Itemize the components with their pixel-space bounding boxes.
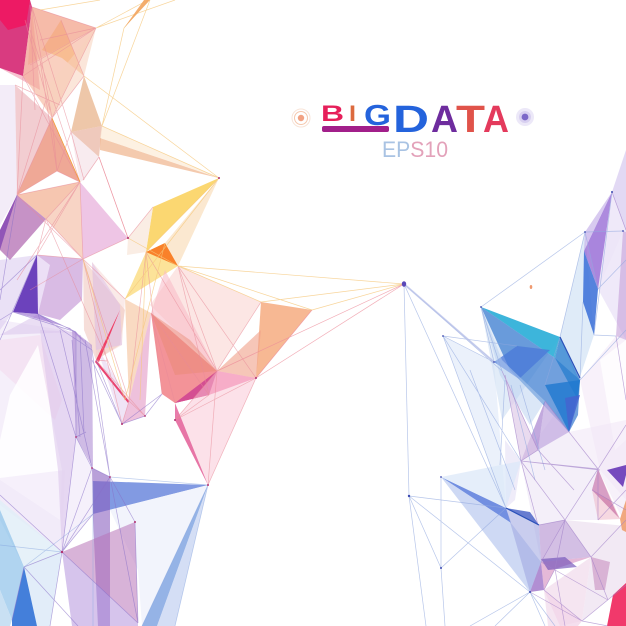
polygon mesh: right cluster <box>404 150 626 626</box>
heading: BIG DATA: A <box>431 99 458 141</box>
mesh: cool wire lines <box>0 195 162 626</box>
heading: BIG DATA: A <box>483 99 509 141</box>
apex node <box>402 281 406 287</box>
mesh: vertex dots <box>61 177 257 553</box>
polygon mesh: left cluster <box>0 0 404 626</box>
heading: BIG DATA: D <box>393 99 429 141</box>
heading: BIG DATA: G <box>364 100 391 132</box>
mesh: violet top facets <box>584 192 626 340</box>
mesh: deep blue ridge line <box>506 337 580 525</box>
logo underbar <box>322 126 389 132</box>
subheading: EPS10: EPS10 <box>382 137 448 162</box>
logo: Big Data title <box>292 99 534 162</box>
heading: BIG DATA: B <box>321 101 344 126</box>
mesh: pink long spokes <box>96 157 404 378</box>
heading: BIG DATA <box>321 99 509 141</box>
mesh: lower left blue and violet facets <box>0 468 208 626</box>
mesh: peach upper facets <box>23 7 219 182</box>
icon: violet concentric target <box>516 108 534 126</box>
mesh: thick light spoke <box>404 284 494 362</box>
heading: BIG DATA: T <box>456 99 485 141</box>
mesh: blue wire lines <box>0 477 208 626</box>
mesh: orange spark top <box>124 0 150 28</box>
mesh: hot pink corner facet <box>607 583 626 626</box>
mesh: pale background veils <box>0 85 129 552</box>
mesh: warm wire lines <box>15 5 261 485</box>
stray orange dot <box>530 285 532 289</box>
mesh: vertex dots <box>408 191 624 593</box>
mesh: orange edge highlight <box>52 118 80 182</box>
mesh: blue wire lines <box>404 192 626 626</box>
mesh: cyan and blue focal facets <box>481 307 580 432</box>
mesh: purple facets <box>13 255 125 468</box>
icon: orange concentric target <box>292 109 310 127</box>
mesh: blue lower facets <box>441 461 541 592</box>
heading: BIG DATA: I <box>349 101 356 126</box>
mesh: yellow focal facet <box>125 178 219 299</box>
mesh: orange and coral facets <box>0 85 128 260</box>
mesh: thin violet lines <box>502 192 626 626</box>
mesh: central coral and pink facets <box>95 266 312 485</box>
mesh: violet middle facets <box>505 375 626 532</box>
mesh: yellow wire lines <box>40 0 404 400</box>
mesh: pale background veils <box>443 150 626 626</box>
mesh: blue vertical facet <box>583 251 598 335</box>
mesh: violet and pink lower facets <box>530 469 620 626</box>
mesh: magenta corner facet <box>0 0 40 90</box>
